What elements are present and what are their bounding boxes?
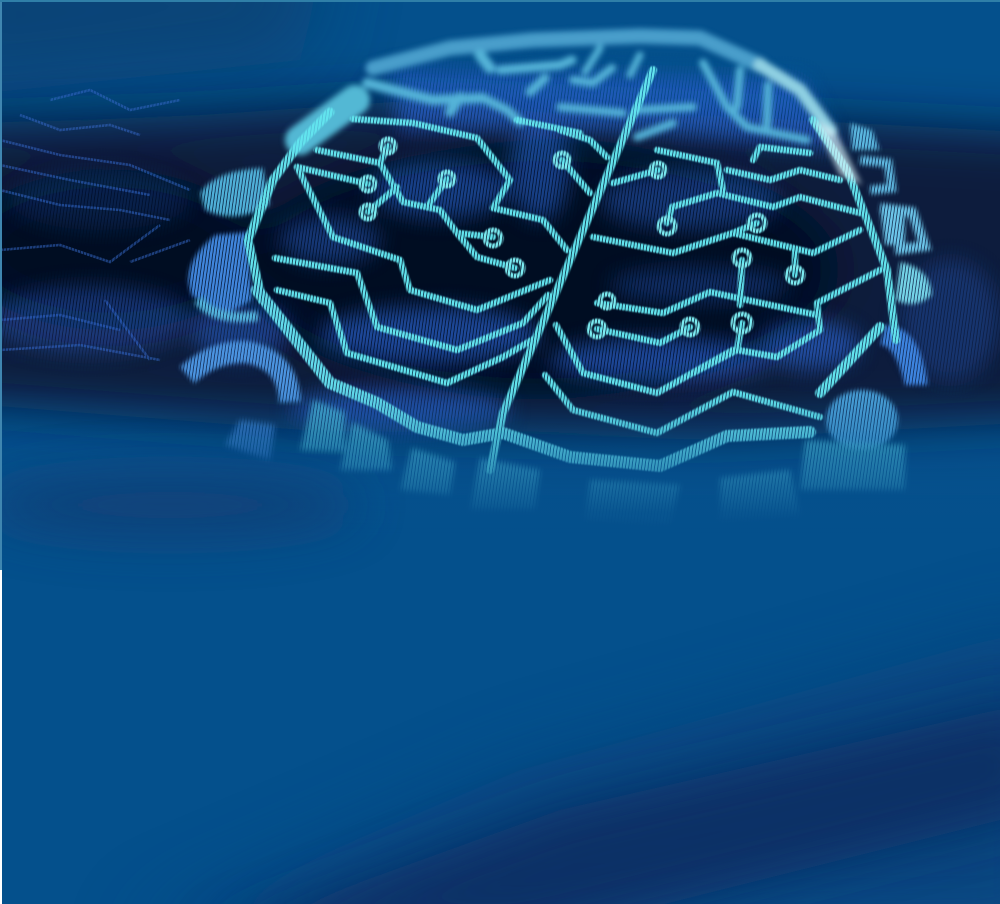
broad soft shadow lower right: [120, 620, 1000, 904]
outer contour right: [813, 120, 896, 340]
left hemisphere: [353, 119, 567, 250]
right hemisphere: [597, 292, 817, 315]
lower fading stripes: [226, 398, 908, 510]
left edge strip: [0, 570, 2, 904]
outer contour left: [248, 112, 330, 300]
blue texture inside the brain: [0, 70, 1000, 432]
dark diagonal shadow lower right: [200, 700, 1000, 904]
dark blur lower left: [0, 473, 360, 537]
dark backdrop behind brain: [0, 100, 1000, 440]
circuit node rings: [361, 139, 803, 337]
brain circuit lines: [248, 70, 896, 470]
blurred upper brain contour: [300, 36, 830, 140]
left circuit board traces: [0, 90, 190, 360]
fade of brain into blue: [0, 385, 1000, 535]
darker upper left haze: [0, 0, 330, 100]
bright glow upper right: [812, 118, 862, 185]
thick lower contour left: [257, 290, 810, 466]
central fissure: [490, 70, 653, 470]
top edge strip: [0, 0, 1000, 2]
brain lobes: outer blobs: [187, 123, 932, 450]
